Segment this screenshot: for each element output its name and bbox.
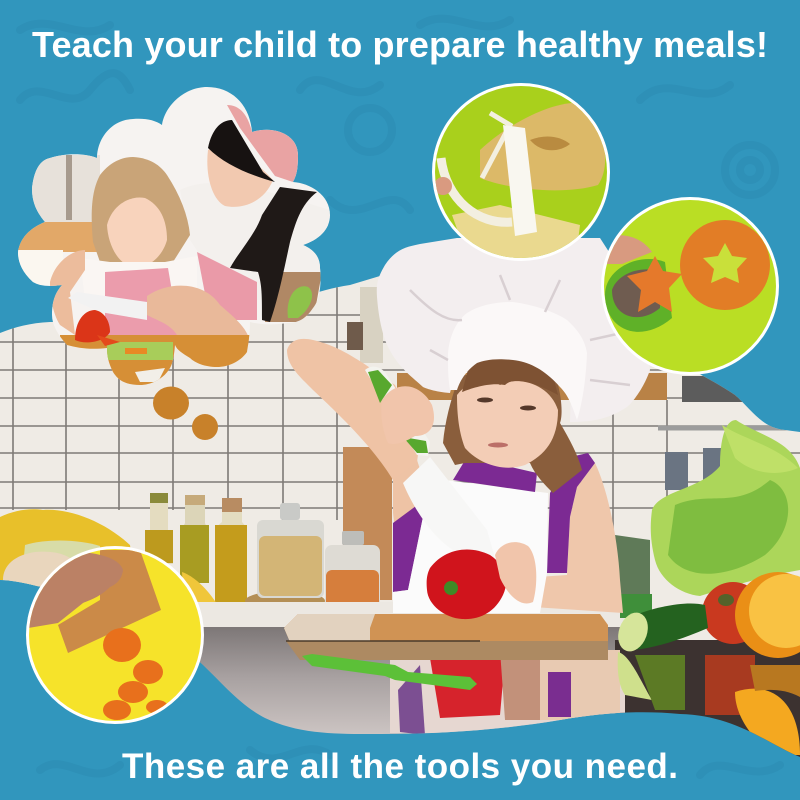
raised arm (287, 339, 420, 480)
child figure (287, 238, 650, 619)
shelf and jars (347, 287, 747, 402)
plant (615, 535, 652, 618)
red bell pepper (427, 549, 506, 619)
thought bubble small (192, 414, 218, 440)
hair (443, 375, 582, 493)
circle: star cutter (600, 195, 780, 380)
table (60, 335, 250, 385)
cutting board (284, 614, 608, 660)
title: Teach your child to prepare healthy meals! (32, 24, 768, 65)
spice jar (325, 531, 380, 602)
green knife on counter (302, 654, 477, 690)
oil bottles (145, 493, 247, 602)
thought cloud: mother and daughter (18, 87, 330, 385)
bottom caption: These are all the tools you need. (122, 747, 678, 786)
left shoulder (393, 460, 430, 530)
girl (92, 157, 190, 262)
kitchen photo (0, 240, 800, 760)
cucumber (618, 604, 708, 652)
counter (198, 602, 380, 627)
right arm (533, 463, 623, 613)
steel counter (200, 627, 625, 739)
knife handle (365, 367, 430, 456)
tomato (703, 582, 747, 644)
circle: peeler (430, 80, 615, 265)
white knife (403, 457, 497, 565)
arms and hands (50, 250, 85, 335)
tomato (75, 310, 110, 342)
lemon (182, 572, 216, 602)
hanging rail and utensils (658, 428, 800, 490)
knife (68, 296, 147, 320)
chef hat (377, 238, 650, 422)
mother (303, 210, 330, 274)
face (457, 355, 558, 468)
pasta jar (245, 503, 325, 611)
hand on handle (381, 386, 434, 444)
blurred room (30, 155, 100, 225)
apron and purple dress (393, 453, 595, 613)
yellow cloth left (0, 509, 130, 587)
wall tiles (0, 240, 800, 640)
dark reflective counter (390, 640, 800, 760)
orange (735, 572, 800, 658)
lettuce (651, 420, 800, 596)
thought bubble large (153, 386, 189, 420)
wooden board on wall (343, 447, 392, 600)
hand holding pepper (495, 542, 536, 603)
circle: cutting carrot (25, 545, 205, 725)
